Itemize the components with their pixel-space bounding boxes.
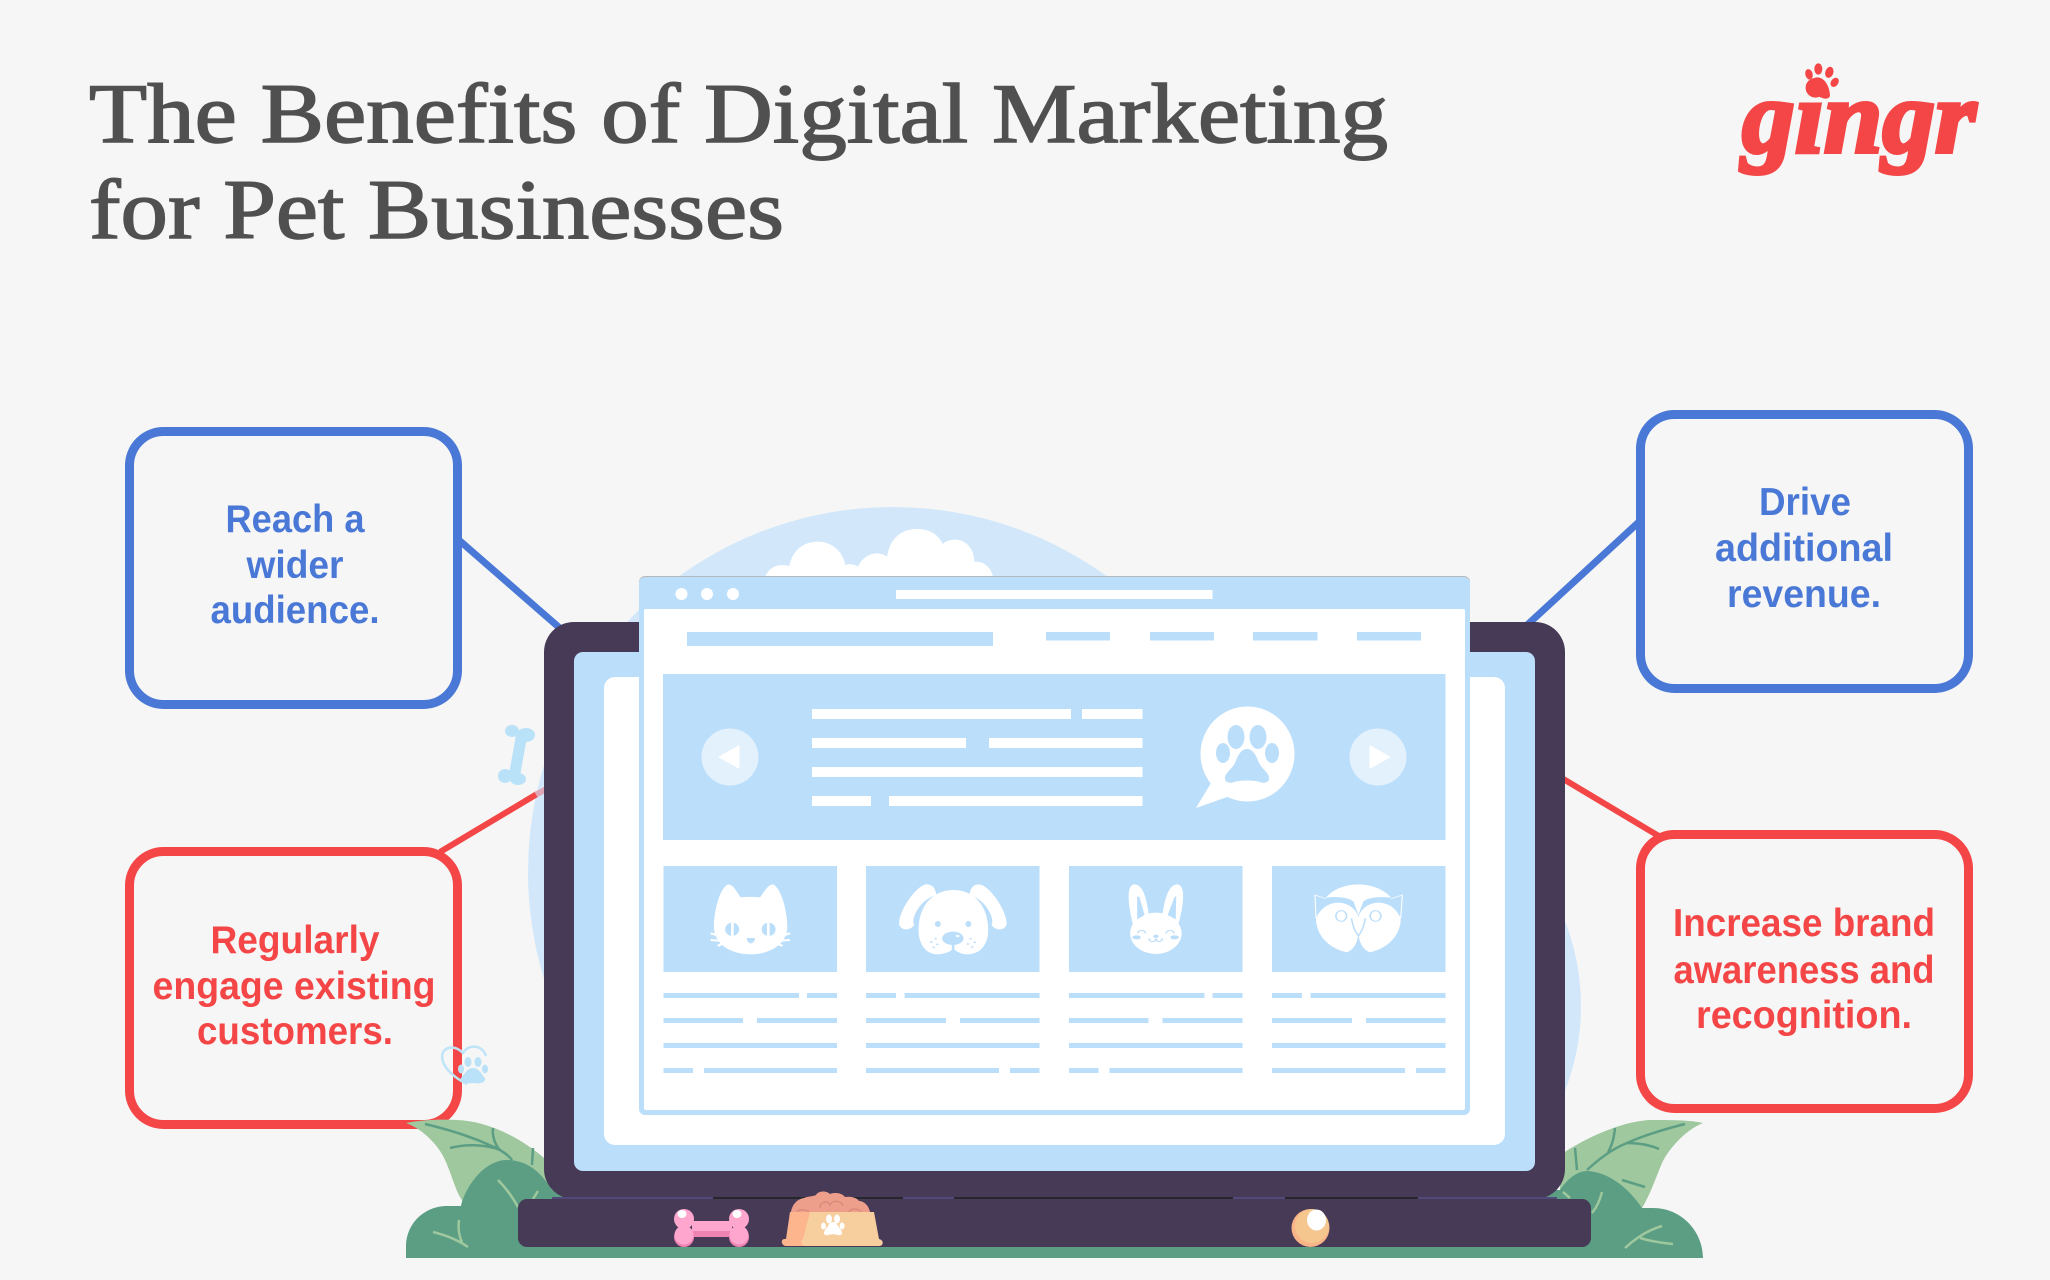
- card: owl: [1272, 866, 1446, 972]
- laptop lid: [544, 622, 1565, 1199]
- card: rabbit: [1069, 866, 1242, 972]
- box: increase brand awareness and recognition: Increase brand: [1673, 902, 1935, 945]
- title: for Pet Businesses: [89, 163, 784, 257]
- card: dog: [866, 866, 1040, 972]
- leaf left: [406, 1120, 552, 1205]
- logo: gingr: gingr: [1740, 60, 1978, 175]
- icon: paw speech bubble: [1196, 706, 1294, 808]
- box: drive additional revenue: [1640, 414, 1968, 688]
- icon: ball: [1292, 1209, 1330, 1247]
- box: reach a wider audience: audience.: [210, 589, 380, 632]
- plants: [406, 1120, 1703, 1258]
- card text lines: [664, 993, 1446, 1073]
- box: drive additional revenue: additional: [1715, 527, 1893, 570]
- box: reach a wider audience: [130, 432, 458, 704]
- hinge strip: [552, 1197, 1557, 1200]
- box: increase brand awareness and recognition: recognition.: [1696, 994, 1912, 1037]
- next button: [1350, 728, 1406, 786]
- bushes and ground: [406, 1160, 1703, 1258]
- pet cards: [664, 866, 1446, 972]
- window dots: [676, 588, 739, 600]
- clouds: [765, 529, 993, 577]
- laptop: [518, 622, 1591, 1247]
- url bar: [896, 590, 1212, 599]
- icon: pink bone: [674, 1209, 749, 1247]
- title: [89, 67, 1388, 257]
- box: regularly engage existing customers: customers.: [197, 1010, 393, 1053]
- title: The Benefits of Digital Marketing: [89, 67, 1388, 161]
- connector: revenue: [1526, 521, 1640, 626]
- box: drive additional revenue: Drive: [1759, 481, 1851, 524]
- site navigation: [687, 632, 1421, 646]
- box: reach a wider audience: wider: [246, 544, 344, 587]
- window frame: [639, 577, 1470, 1115]
- connector: engage: [440, 788, 548, 852]
- icon: small blue bone: [498, 725, 535, 785]
- box: reach a wider audience: Reach a: [226, 498, 365, 541]
- previous button: [702, 728, 758, 786]
- box: regularly engage existing customers: Regularly: [210, 919, 380, 962]
- box: drive additional revenue: revenue.: [1727, 573, 1881, 616]
- laptop base: [518, 1199, 1591, 1247]
- hero banner: [663, 674, 1446, 840]
- box: regularly engage existing customers: [130, 852, 458, 1124]
- screen white panel: [604, 677, 1505, 1145]
- connector: reach: [460, 541, 562, 630]
- browser window: [639, 576, 1470, 1115]
- icon: food bowl: [782, 1191, 883, 1246]
- laptop screen: [574, 652, 1535, 1171]
- bush veins: [433, 1180, 1673, 1248]
- card: cat: [664, 866, 837, 972]
- box: increase brand awareness and recognition: awareness and: [1674, 949, 1934, 992]
- background circles: [528, 507, 1581, 1240]
- icon: heart with paw: [442, 1047, 488, 1084]
- connector: brand: [1560, 777, 1662, 838]
- box: regularly engage existing customers: engage existing: [152, 965, 436, 1008]
- banner text lines: [812, 709, 1142, 806]
- leaf right: [1560, 1120, 1703, 1208]
- box: increase brand awareness and recognition: [1640, 834, 1968, 1108]
